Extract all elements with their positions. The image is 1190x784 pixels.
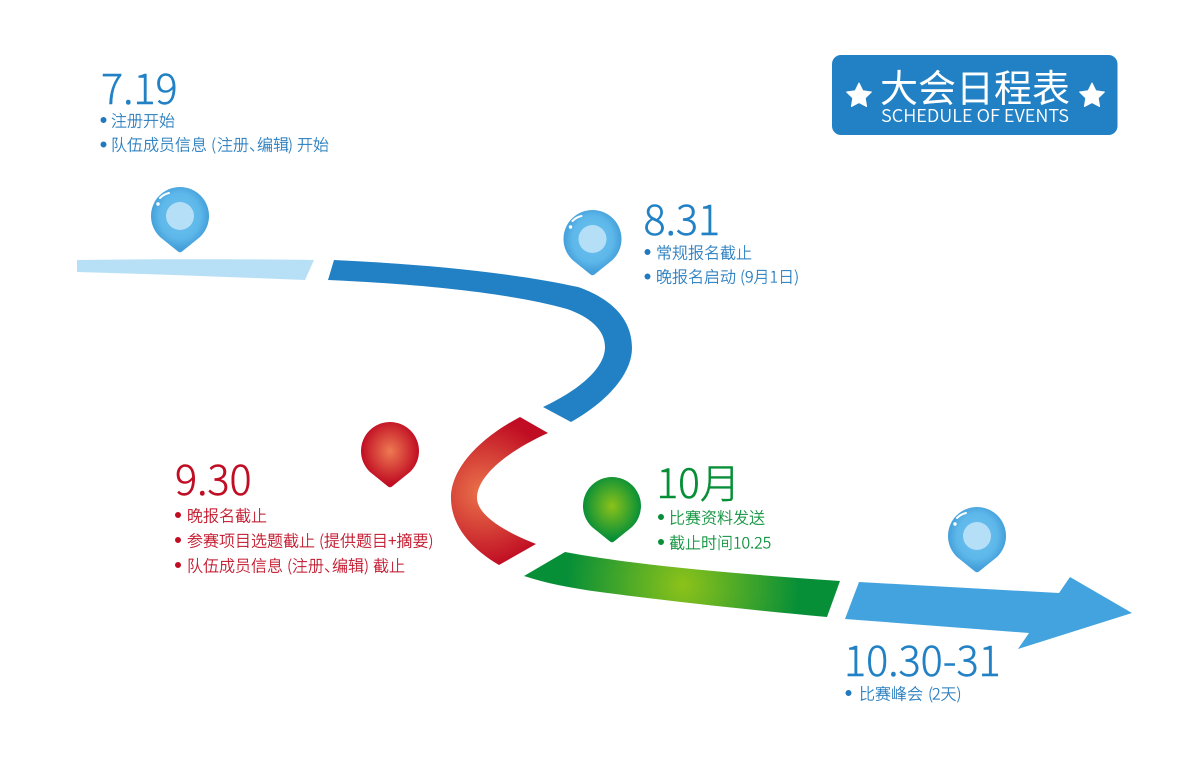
list item: ( (740, 264, 745, 288)
list item: ( (928, 680, 933, 704)
list item: 、 (249, 132, 265, 156)
road segment: October green (524, 552, 840, 617)
date 10.30-31: 10.30-31 (844, 628, 1001, 688)
milestone 7.19 text (101, 56, 329, 156)
road segment: 7.19 light blue (77, 259, 314, 280)
list item: 9月1日) (745, 264, 799, 288)
list item: 截止时间10.25 (669, 530, 771, 554)
icon: left star (847, 83, 871, 106)
list item: 晚报名启动 (656, 264, 736, 288)
list item (176, 528, 434, 552)
milestone 8.31 text (644, 187, 799, 288)
icon: pin 8.31 (564, 210, 622, 275)
icon: right star (1080, 83, 1104, 106)
list item: 注册开始 (111, 108, 175, 132)
arrow: final road segment (845, 577, 1132, 649)
list item: 比赛峰会 (859, 680, 923, 704)
list item: ( (211, 132, 216, 156)
list item (846, 680, 962, 704)
icon: pin October (583, 477, 641, 542)
list item: 2天) (932, 680, 962, 704)
list item: 常规报名截止 (656, 240, 752, 264)
road segment: 8.31 blue (328, 260, 632, 422)
list item: 队伍成员信息 (111, 132, 207, 156)
list item: 晚报名截止 (187, 502, 267, 526)
list item: 开始 (297, 132, 329, 156)
icon: pin 7.19 (151, 187, 209, 252)
date 9.30: 9.30 (175, 447, 252, 507)
icon: pin 9.30 (361, 422, 419, 487)
list item (645, 264, 799, 288)
list item: ) (364, 552, 369, 576)
date 10月: 10月 (656, 451, 740, 510)
list item: 提供题目+摘要) (324, 528, 434, 552)
list item: 队伍成员信息 (187, 552, 283, 576)
milestone 10.30-31 text (844, 628, 1001, 704)
list item: 注册 (292, 552, 324, 576)
milestone October text (656, 451, 771, 554)
list item: 、 (324, 552, 340, 576)
icon: pin 10.30-31 (948, 507, 1006, 572)
list item: ( (287, 552, 292, 576)
list item: 截止 (373, 552, 405, 576)
list item: 编辑 (257, 132, 289, 156)
list item: 注册 (217, 132, 249, 156)
list item (101, 132, 329, 156)
list item: ) (288, 132, 293, 156)
milestone 9.30 text (175, 447, 434, 576)
date 8.31: 8.31 (644, 187, 720, 247)
list item: ( (319, 528, 324, 552)
title badge (832, 55, 1118, 135)
title: 大会日程表 (880, 58, 1070, 113)
list item (176, 552, 405, 576)
date 7.19: 7.19 (101, 56, 178, 116)
subtitle: SCHEDULE OF EVENTS (881, 102, 1069, 128)
list item: 编辑 (332, 552, 364, 576)
list item: 参赛项目选题截止 (187, 528, 315, 552)
list item: 比赛资料发送 (669, 504, 765, 528)
road segment: 9.30 red (451, 417, 548, 565)
